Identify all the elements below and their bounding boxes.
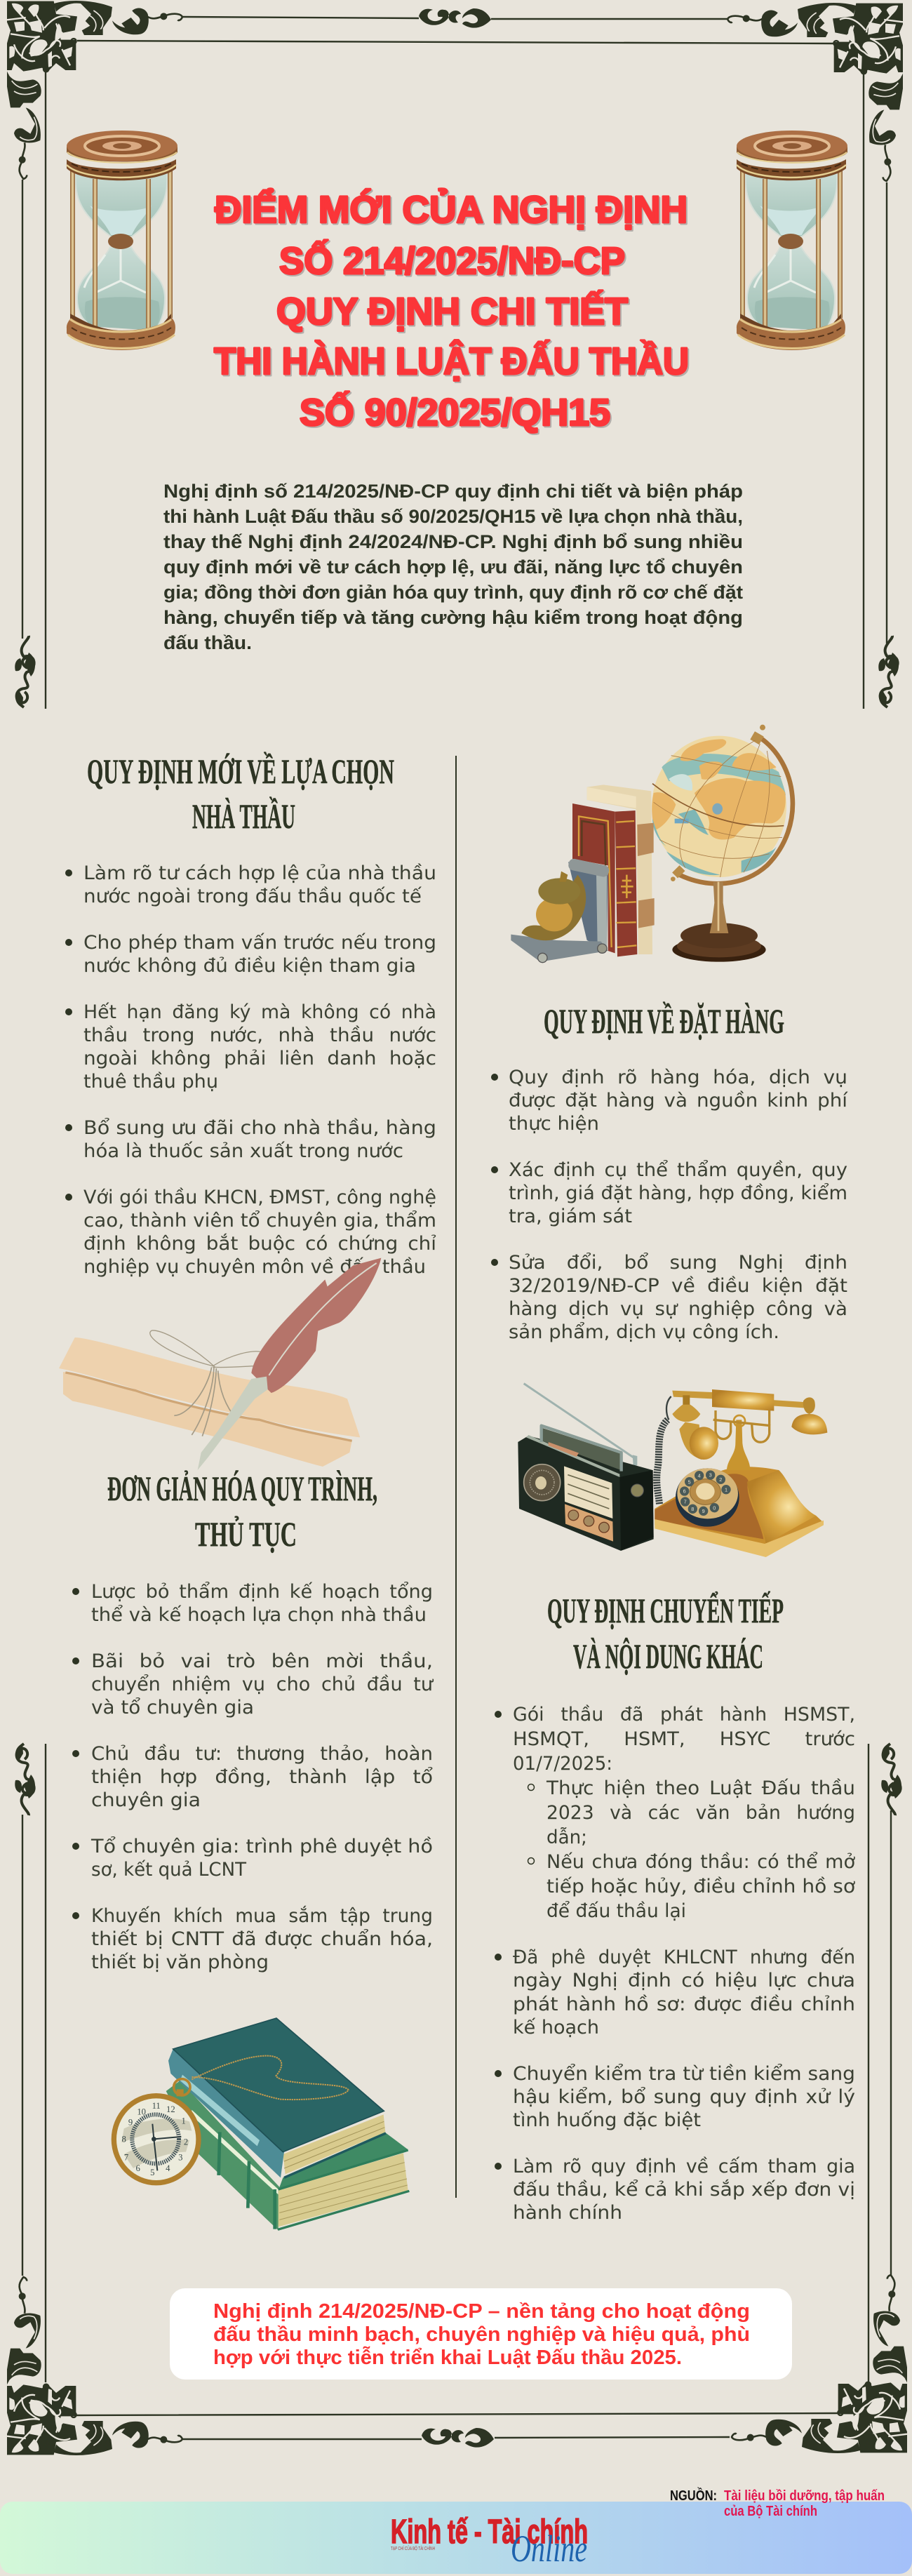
icon: radio and telephone: 3 — [709, 1472, 712, 1479]
heading: NHÀ THẦU — [192, 796, 295, 836]
bullet list: thực hiện — [509, 1113, 599, 1135]
bullet list: để đấu thầu lại — [546, 1900, 686, 1922]
bullet list: hậu kiểm, bổ sung quy định xử lý — [513, 2086, 855, 2108]
heading — [87, 751, 394, 836]
logo: Kinh tế - Tài chính Online: Kinh tế - Tài chính — [391, 2514, 588, 2551]
title — [214, 189, 689, 434]
icon: radio and telephone: 5 — [688, 1479, 691, 1485]
bullet list: hóa là thuốc sản xuất trong nước — [83, 1140, 403, 1162]
source note — [670, 2487, 885, 2519]
bullet list: Lược bỏ thẩm định kế hoạch tổng — [91, 1581, 433, 1603]
bullet list: Nếu chưa đóng thầu: có thể mở — [546, 1851, 855, 1873]
bullet list: Làm rõ tư cách hợp lệ của nhà thầu — [83, 862, 436, 884]
intro text block: hàng, chuyển tiếp và tăng cường hậu kiểm trong hoạt động — [163, 607, 743, 628]
icon: radio and telephone: 9 — [702, 1508, 705, 1514]
bullet list: chuyên gia — [91, 1789, 201, 1811]
bullet list: Chủ đầu tư: thương thảo, hoàn — [91, 1743, 433, 1765]
icon: books and pocket watch: 12 — [166, 2104, 175, 2114]
heading — [547, 1590, 784, 1676]
bullet list: dẫn; — [546, 1827, 587, 1848]
bullet list: kế hoạch — [513, 2017, 599, 2038]
bullet list: thuê thầu phụ — [83, 1071, 218, 1093]
bullet list: tình huống đặc biệt — [513, 2109, 701, 2131]
bullet list: 2023 và các văn bản hướng — [546, 1802, 855, 1824]
bullet list: phát hành hồ sơ: được điều chỉnh — [513, 1994, 855, 2015]
source note: của Bộ Tài chính — [724, 2504, 817, 2519]
bullet list: và tổ chuyên gia — [91, 1697, 254, 1719]
bullet list: Xác định cụ thể thẩm quyền, quy — [509, 1159, 847, 1181]
bullet list: tiếp hoặc hủy, điều chỉnh hồ sơ — [546, 1876, 855, 1897]
icon: books and pocket watch: 9 — [128, 2117, 133, 2127]
heading — [107, 1469, 377, 1554]
bullet list: trình, giá đặt hàng, hợp đồng, kiểm — [509, 1182, 847, 1204]
bullet list: Làm rõ quy định về cấm tham gia — [513, 2156, 855, 2177]
panel: đơn giản hóa quy trình, thủ tục — [72, 1469, 434, 1973]
intro text block: đấu thầu. — [163, 632, 252, 653]
icon: books and pocket watch: 3 — [178, 2152, 182, 2162]
intro text block: Nghị định số 214/2025/NĐ-CP quy định chi tiết và biện pháp — [163, 481, 743, 502]
icon: books and pocket watch: 10 — [137, 2107, 146, 2116]
bullet list: 01/7/2025: — [513, 1753, 612, 1775]
icon: books and pocket watch: 4 — [166, 2163, 170, 2173]
bullet list: ngoài không phải liên danh hoặc — [83, 1048, 436, 1069]
bullet list: sản phẩm, dịch vụ công ích. — [509, 1321, 779, 1343]
bullet list: HSMQT, HSMT, HSYC trước — [513, 1728, 855, 1750]
heading: QUY ĐỊNH MỚI VỀ LỰA CHỌN — [87, 751, 394, 791]
callout: white conclusion box: đấu thầu minh bạch, chuyên nghiệp và hiệu quả, phù — [213, 2323, 750, 2346]
decorative frame: top section — [7, 1, 903, 709]
icon: books and pocket watch: 11 — [152, 2101, 161, 2111]
bullet list: Thực hiện theo Luật Đấu thầu — [546, 1777, 855, 1799]
icon: books and pocket watch: 6 — [136, 2163, 140, 2173]
intro text block: quy định mới về tư cách hợp lệ, ưu đãi, năng lực tổ chuyên — [163, 556, 743, 578]
bullet list — [495, 1704, 855, 2224]
bullet list: Bổ sung ưu đãi cho nhà thầu, hàng — [83, 1117, 436, 1139]
icon: radio and telephone: 2 — [719, 1476, 722, 1483]
bullet list — [72, 1581, 434, 1973]
icon: radio and telephone: 1 — [725, 1486, 727, 1493]
panel: quy định chuyển tiếp và nội dung khác — [495, 1590, 855, 2224]
bullet list: thiết bị văn phòng — [91, 1951, 269, 1973]
icon: radio and telephone: 0 — [713, 1504, 716, 1511]
bullet list — [491, 1067, 849, 1343]
icon: books and pocket watch — [112, 2018, 409, 2230]
bullet list: Với gói thầu KHCN, ĐMST, công nghệ — [83, 1187, 436, 1208]
bullet list: định không bắt buộc có chứng chỉ — [83, 1233, 436, 1255]
bullet list: hàng dịch vụ sự nghiệp công và — [509, 1298, 847, 1320]
bullet list: thiết bị CNTT đã được chuẩn hóa, — [91, 1928, 433, 1950]
icon: radio and telephone — [518, 1384, 827, 1557]
panel: quy định mới về lựa chọn nhà thầu — [65, 751, 436, 1278]
bullet list — [65, 862, 436, 1278]
center column divider — [455, 756, 457, 2198]
bullet list: nước ngoài trong đấu thầu quốc tế — [83, 886, 422, 907]
bullet list: chuyển nhiệm vụ cho chủ đầu tư — [91, 1674, 434, 1695]
footer bar — [0, 2502, 912, 2574]
bullet list: Hết hạn đăng ký mà không có nhà — [83, 1001, 436, 1023]
bullet list: Sửa đổi, bổ sung Nghị định — [509, 1252, 847, 1274]
bullet list: ngày Nghị định có hiệu lực chưa — [513, 1970, 855, 1991]
decorative frame: bottom section — [7, 1744, 907, 2455]
callout: white conclusion box: Nghị định 214/2025/NĐ-CP – nền tảng cho hoạt động — [213, 2300, 750, 2323]
bullet list: Quy định rõ hàng hóa, dịch vụ — [509, 1067, 847, 1088]
icon: books and pocket watch: 7 — [124, 2152, 128, 2162]
bullet list: Chuyển kiểm tra từ tiền kiểm sang — [513, 2063, 855, 2085]
bullet list: cao, thành viên tổ chuyên gia, thẩm — [83, 1210, 436, 1232]
icon: books and pocket watch: 5 — [150, 2168, 154, 2177]
heading: ĐƠN GIẢN HÓA QUY TRÌNH, — [107, 1469, 377, 1508]
intro text block: gia; đồng thời đơn giản hóa quy trình, quy định rõ cơ chế đặt — [163, 582, 743, 603]
bullet list: 32/2019/NĐ-CP về điều kiện đặt — [509, 1275, 847, 1297]
icon: left hourglass — [67, 131, 177, 350]
icon: books and pocket watch: 8 — [122, 2135, 126, 2144]
icon: radio and telephone: 4 — [698, 1472, 701, 1479]
icon: books and pocket watch: 1 — [182, 2116, 186, 2126]
callout: white conclusion box: hợp với thực tiễn triển khai Luật Đấu thầu 2025. — [213, 2345, 682, 2369]
source note: NGUỒN: — [670, 2487, 717, 2504]
bullet list: đấu thầu, kể cả khi sắp xếp đơn vị — [513, 2179, 855, 2201]
bullet list: nghiệp vụ chuyên môn về đấu thầu — [83, 1256, 426, 1278]
bullet list: tra, giám sát — [509, 1206, 632, 1227]
bullet list: thiện hợp đồng, thành lập tổ — [91, 1766, 433, 1788]
title: QUY ĐỊNH CHI TIẾT — [276, 291, 628, 333]
bullet list: Gói thầu đã phát hành HSMST, — [513, 1704, 855, 1726]
heading: THỦ TỤC — [195, 1514, 297, 1554]
title: ĐIỂM MỚI CỦA NGHỊ ĐỊNH — [215, 189, 688, 231]
title: SỐ 90/2025/QH15 — [300, 392, 610, 434]
callout: white conclusion box — [170, 2288, 792, 2380]
icon: books and pocket watch: 2 — [184, 2137, 188, 2147]
bullet list: hành chính — [513, 2202, 622, 2224]
bullet list: thể và kế hoạch lựa chọn nhà thầu — [91, 1604, 427, 1626]
source note: Tài liệu bồi dưỡng, tập huấn — [724, 2488, 885, 2504]
bullet list: thầu trong nước, nhà thầu nước — [83, 1025, 436, 1046]
logo: Kinh tế - Tài chính Online: TẠP CHÍ CỦA BỘ TÀI CHÍNH — [391, 2545, 435, 2551]
bullet list: Đã phê duyệt KHLCNT nhưng đến — [513, 1947, 855, 1968]
bullet list: được đặt hàng và nguồn kinh phí — [509, 1090, 849, 1112]
bullet list: Khuyến khích mua sắm tập trung — [91, 1905, 433, 1927]
bullet list: Bãi bỏ vai trò bên mời thầu, — [91, 1650, 433, 1672]
intro text block — [163, 481, 743, 653]
icon: radio and telephone: 6 — [683, 1488, 686, 1495]
title: SỐ 214/2025/NĐ-CP — [279, 240, 625, 282]
icon: radio and telephone: 7 — [684, 1499, 687, 1505]
intro text block: thay thế Nghị định 24/2024/NĐ-CP. Nghị định bổ sung nhiều — [163, 531, 743, 552]
icon: globe and books — [511, 725, 793, 963]
logo: Kinh tế - Tài chính Online — [391, 2514, 588, 2570]
bullet list: Cho phép tham vấn trước nếu trong — [83, 932, 436, 954]
icon: scroll and quill — [59, 1258, 381, 1470]
icon: radio and telephone: 8 — [691, 1506, 694, 1512]
intro text block: thi hành Luật Đấu thầu số 90/2025/QH15 về lựa chọn nhà thầu, — [163, 506, 743, 527]
logo: Kinh tế - Tài chính Online: Online — [511, 2528, 587, 2570]
bullet list: Tổ chuyên gia: trình phê duyệt hồ — [90, 1836, 433, 1857]
bullet list: sơ, kết quả LCNT — [91, 1859, 247, 1881]
bullet list: nước không đủ điều kiện tham gia — [83, 955, 416, 977]
panel: quy định về đặt hàng — [491, 1001, 849, 1343]
icon: right hourglass — [737, 131, 847, 350]
title: THI HÀNH LUẬT ĐẤU THẦU — [214, 340, 689, 382]
